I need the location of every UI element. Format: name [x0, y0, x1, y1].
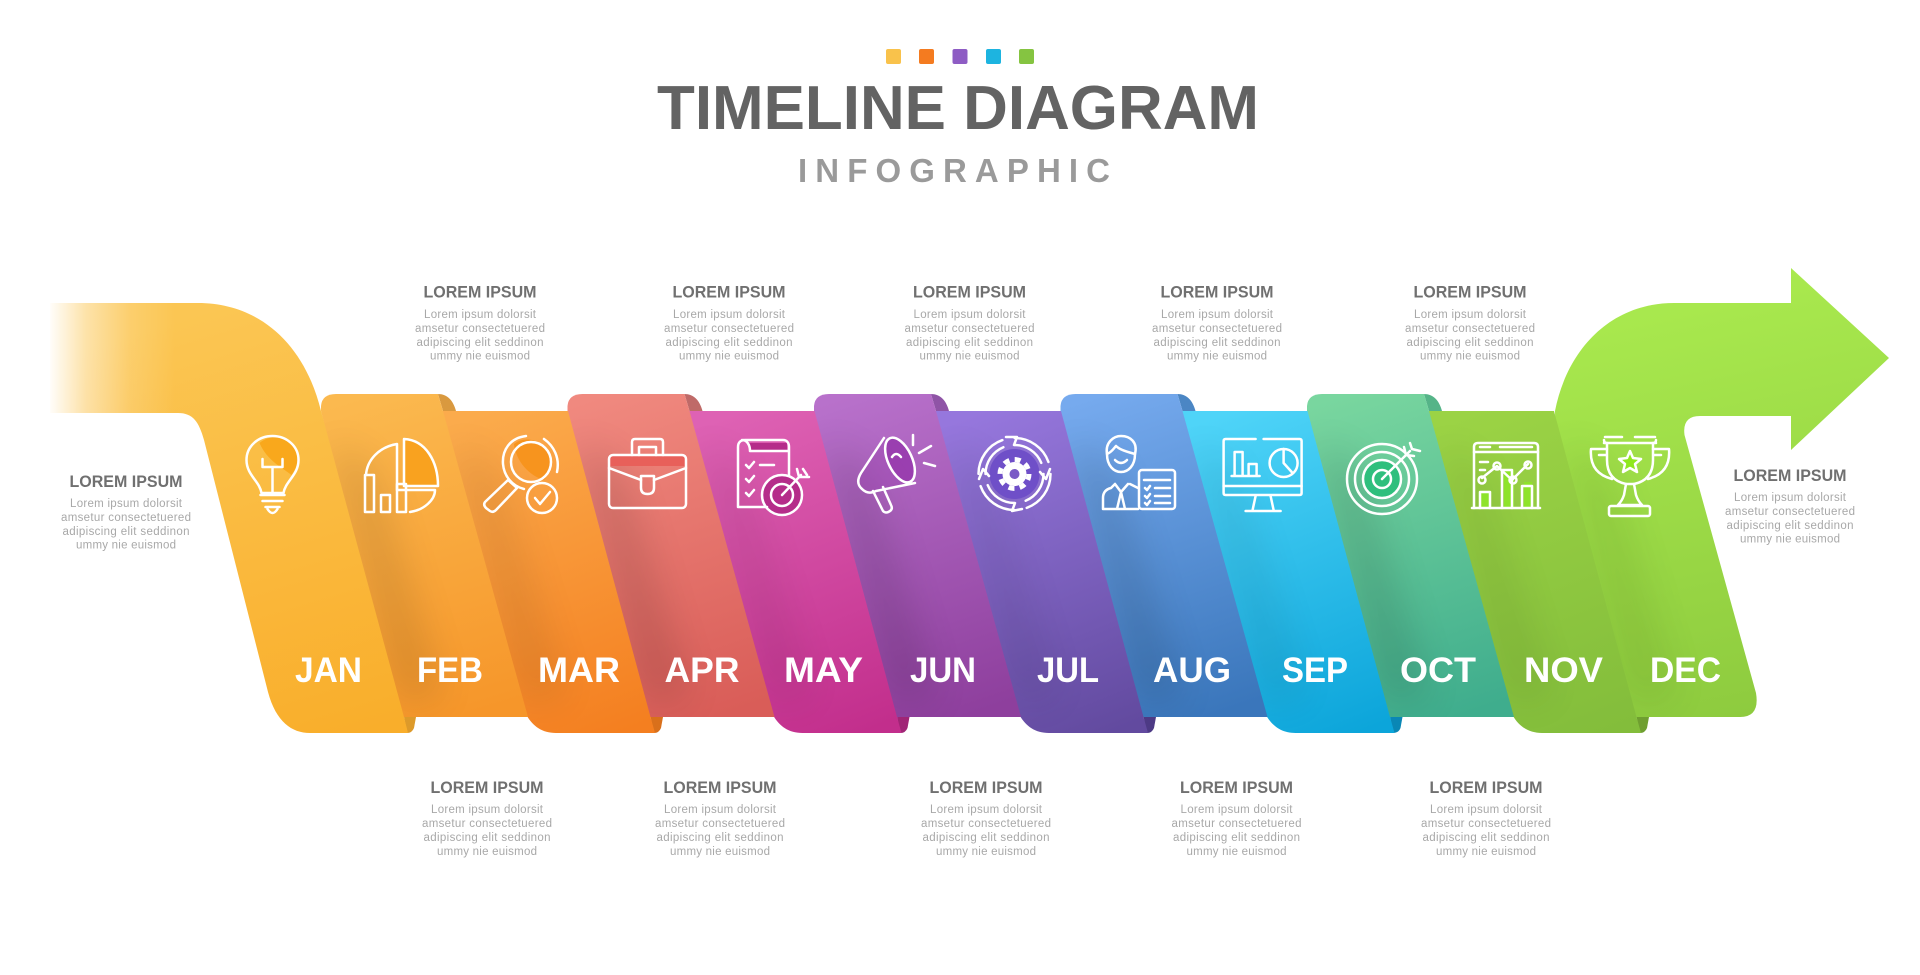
icon: chart window — [1472, 443, 1540, 508]
text block: top 1: ummy nie euismod — [430, 350, 530, 362]
text block: bottom 3 — [921, 779, 1051, 858]
text block: left: Lorem ipsum dolorsit — [70, 498, 183, 510]
icon: briefcase — [609, 439, 686, 508]
month labels: APR — [664, 650, 740, 690]
month labels — [295, 650, 1721, 690]
text block: bottom 2: ummy nie euismod — [670, 846, 770, 858]
icon: gear cycle — [978, 437, 1050, 511]
text block: right — [1725, 467, 1855, 546]
colour squares — [886, 49, 1034, 64]
text block: top 2: amsetur consectetuered — [664, 323, 794, 335]
MAY segment — [682, 411, 910, 733]
icon: checklist with target — [738, 440, 809, 515]
ribbon arrow timeline — [40, 268, 1889, 733]
text block: bottom 5: Lorem ipsum dolorsit — [1430, 804, 1543, 816]
MAR segment — [435, 411, 663, 733]
text block: bottom 4: adipiscing elit seddinon — [1173, 832, 1300, 844]
text block: bottom 5: ummy nie euismod — [1436, 846, 1536, 858]
text block: right: amsetur consectetuered — [1725, 506, 1855, 518]
text block: bottom 3: ummy nie euismod — [936, 846, 1036, 858]
text block: bottom 1: LOREM IPSUM — [430, 779, 544, 797]
text block: top 3: amsetur consectetuered — [904, 323, 1034, 335]
text block: bottom 2: Lorem ipsum dolorsit — [664, 804, 777, 816]
text block: top 4: adipiscing elit seddinon — [1154, 337, 1280, 349]
AUG segment — [1060, 394, 1268, 717]
text block: top 2: Lorem ipsum dolorsit — [673, 309, 786, 321]
month labels: OCT — [1400, 650, 1476, 690]
JUN segment — [814, 394, 1021, 717]
APR segment — [568, 394, 774, 717]
text block: top 5: LOREM IPSUM — [1414, 284, 1526, 302]
text block: bottom 4: Lorem ipsum dolorsit — [1180, 804, 1293, 816]
text block: bottom 2 — [655, 779, 785, 858]
text block: bottom 2: amsetur consectetuered — [655, 818, 785, 830]
month labels: NOV — [1524, 650, 1603, 690]
text block: bottom 2: adipiscing elit seddinon — [656, 832, 784, 844]
text block: top 4: Lorem ipsum dolorsit — [1161, 309, 1274, 321]
text block: right: ummy nie euismod — [1740, 534, 1840, 546]
icon: magnifier with check — [484, 436, 558, 513]
text block: bottom 4: amsetur consectetuered — [1172, 818, 1302, 830]
text block: bottom 2: LOREM IPSUM — [664, 779, 776, 797]
FEB segment — [321, 394, 528, 717]
month labels: JAN — [295, 650, 362, 690]
text block: top 1: LOREM IPSUM — [424, 284, 536, 302]
text block: right: LOREM IPSUM — [1734, 467, 1846, 485]
month labels: SEP — [1282, 650, 1348, 690]
text block: left: ummy nie euismod — [76, 540, 176, 552]
text block: top 5: ummy nie euismod — [1420, 350, 1520, 362]
text block: top 2: ummy nie euismod — [679, 350, 779, 362]
text block: top 2 — [664, 284, 794, 362]
text block: bottom 4: ummy nie euismod — [1186, 846, 1286, 858]
text block: top 4: amsetur consectetuered — [1152, 323, 1282, 335]
text block: bottom 1: ummy nie euismod — [437, 846, 537, 858]
text block: left — [61, 473, 191, 552]
text block: bottom 4: LOREM IPSUM — [1180, 779, 1293, 797]
text block: top 3 — [904, 284, 1034, 362]
icon: trophy — [1591, 437, 1669, 516]
text block: bottom 5: LOREM IPSUM — [1430, 779, 1542, 797]
text block: right: adipiscing elit seddinon — [1726, 520, 1854, 532]
JAN segment — [40, 300, 416, 733]
text block: top 1 — [415, 284, 545, 362]
text block: bottom 3: LOREM IPSUM — [930, 779, 1042, 797]
icon: person with list — [1103, 436, 1175, 509]
text block: bottom 1: Lorem ipsum dolorsit — [431, 804, 544, 816]
text block: bottom 3: Lorem ipsum dolorsit — [930, 804, 1043, 816]
icon: megaphone — [858, 433, 935, 512]
text block: bottom 5: adipiscing elit seddinon — [1422, 832, 1550, 844]
text block: left: LOREM IPSUM — [70, 473, 182, 491]
subtitle: INFOGRAPHIC — [798, 152, 1110, 189]
text block: top 3: adipiscing elit seddinon — [906, 337, 1033, 349]
text block: top 5: adipiscing elit seddinon — [1406, 337, 1534, 349]
text block: bottom 1: adipiscing elit seddinon — [424, 832, 550, 844]
DEC arrow segment — [1555, 268, 1889, 717]
text block: top 5: amsetur consectetuered — [1405, 323, 1535, 335]
OCT segment — [1307, 394, 1514, 717]
title block — [657, 49, 1259, 189]
text block: bottom 1: amsetur consectetuered — [422, 818, 552, 830]
text block: top 1: amsetur consectetuered — [415, 323, 545, 335]
text block: top 3: Lorem ipsum dolorsit — [914, 309, 1026, 321]
text block: left: amsetur consectetuered — [61, 512, 191, 524]
text block: right: Lorem ipsum dolorsit — [1734, 492, 1847, 504]
text block: top 1: Lorem ipsum dolorsit — [424, 309, 537, 321]
month labels: AUG — [1153, 650, 1231, 690]
text block: left: adipiscing elit seddinon — [62, 526, 190, 538]
SEP segment — [1174, 411, 1402, 733]
month labels: MAR — [538, 650, 620, 690]
month labels: JUL — [1037, 650, 1099, 690]
text block: top 5: Lorem ipsum dolorsit — [1414, 309, 1527, 321]
text block: bottom 5 — [1421, 779, 1551, 858]
text block: top 4 — [1152, 284, 1282, 362]
icon: light bulb — [246, 436, 298, 513]
text block: top 5 — [1405, 284, 1535, 362]
month labels: JUN — [910, 650, 976, 690]
text block: top 3: ummy nie euismod — [920, 350, 1020, 362]
text block: top 3: LOREM IPSUM — [913, 284, 1026, 302]
text block: bottom 4 — [1172, 779, 1302, 858]
title: TIMELINE DIAGRAM — [657, 74, 1259, 143]
month labels: MAY — [784, 650, 863, 690]
month labels: DEC — [1650, 650, 1721, 690]
icon: monitor dashboard — [1224, 439, 1302, 511]
text block: bottom 1 — [422, 779, 552, 858]
JUL segment — [928, 411, 1156, 733]
icon: target — [1347, 443, 1420, 514]
text block: bottom 5: amsetur consectetuered — [1421, 818, 1551, 830]
icon: pie chart and bars — [365, 439, 438, 512]
text block: top 4: LOREM IPSUM — [1160, 284, 1274, 302]
text block: top 2: adipiscing elit seddinon — [666, 337, 792, 349]
text block: bottom 3: amsetur consectetuered — [921, 818, 1051, 830]
text block: top 4: ummy nie euismod — [1167, 350, 1267, 362]
text block: top 1: adipiscing elit seddinon — [416, 337, 544, 349]
month labels: FEB — [417, 650, 483, 690]
text block: bottom 3: adipiscing elit seddinon — [922, 832, 1050, 844]
NOV segment — [1421, 411, 1649, 733]
text block: top 2: LOREM IPSUM — [672, 284, 786, 302]
